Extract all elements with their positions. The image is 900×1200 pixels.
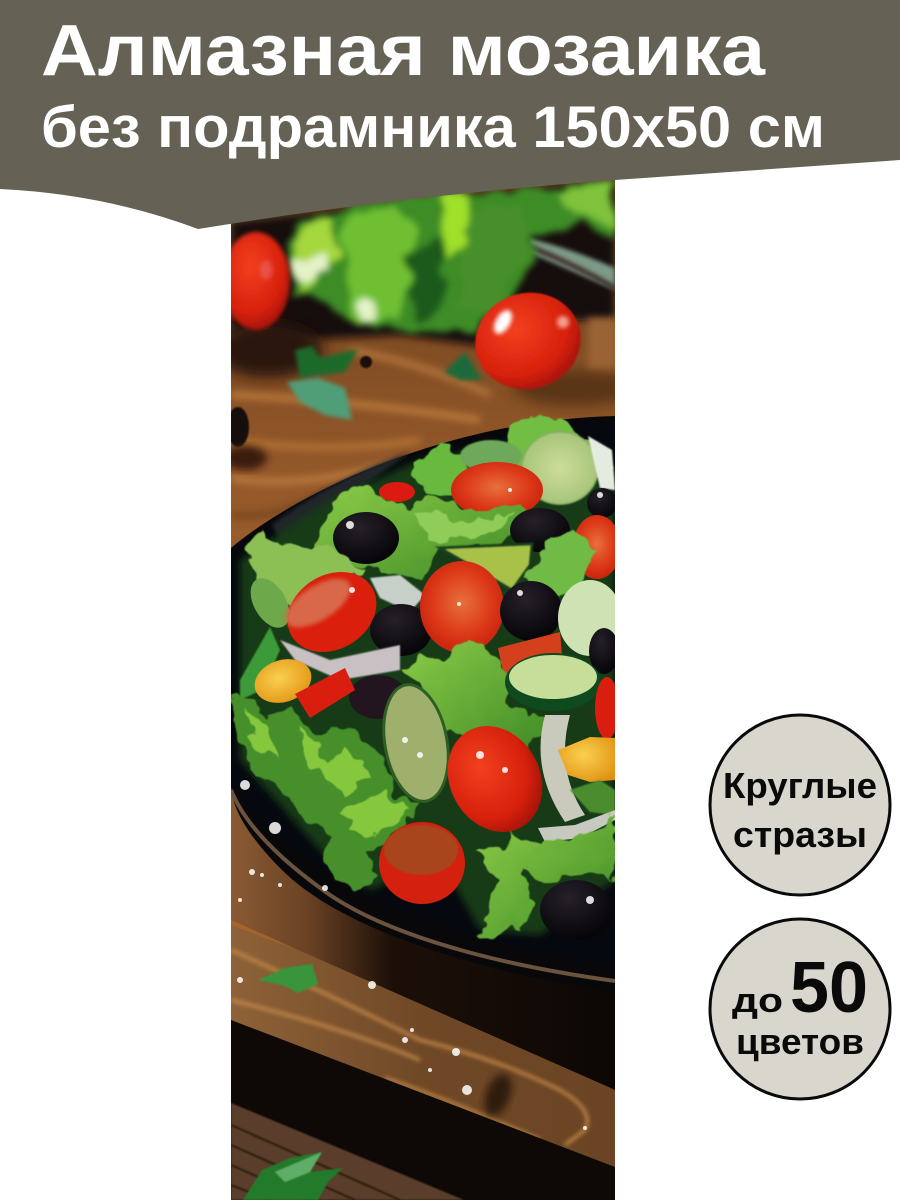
lettuce upper left <box>410 445 470 495</box>
cucumber top right <box>521 431 599 505</box>
lettuce centre <box>404 636 548 755</box>
green leaves left <box>240 627 280 700</box>
blurred lettuce at the top <box>292 182 615 335</box>
tomato half bottom face <box>384 825 458 875</box>
cucumber behind <box>460 440 522 472</box>
dark pepper on table <box>360 356 372 368</box>
sliced tomato top <box>451 462 543 518</box>
photo: salad on a wooden table <box>231 180 615 1200</box>
tomato body <box>222 232 290 330</box>
tomato half cut face <box>278 569 359 637</box>
olive shadow <box>223 446 267 470</box>
blurred tomato centre <box>474 292 582 390</box>
cucumber round <box>505 653 601 711</box>
dark background behind the greens <box>231 180 615 350</box>
tomato half left <box>273 556 391 668</box>
badge: round rhinestones <box>710 715 890 895</box>
tomato right edge <box>573 515 621 579</box>
tomato far right <box>595 677 619 739</box>
plate inner sheen <box>272 452 410 550</box>
plate surface <box>231 422 615 966</box>
dark lettuce base behind vegetables <box>240 440 615 935</box>
bottom striped boards <box>231 1103 464 1200</box>
red pepper <box>379 482 415 502</box>
olive left of centre <box>333 512 399 564</box>
lettuce bright strip <box>440 195 470 260</box>
tomato highlight <box>490 307 516 337</box>
lettuce dark fold <box>405 235 445 325</box>
onion lower <box>280 640 400 680</box>
olive far right <box>589 628 619 674</box>
herb lower leaf <box>287 378 352 420</box>
onion middle <box>370 575 425 612</box>
cucumber round face <box>509 655 597 699</box>
badge: up to 50 colours <box>710 919 890 1099</box>
herb upper leaf <box>295 346 358 378</box>
lettuce highlight <box>415 510 515 540</box>
cucumber right <box>558 580 622 656</box>
dark bottom plank <box>231 1020 615 1200</box>
plate rim highlight <box>231 790 615 981</box>
cucumber wedge <box>440 544 532 590</box>
tomato centre <box>420 561 504 653</box>
lettuce bright leaf left <box>296 216 342 295</box>
yellow tomato <box>249 652 317 710</box>
lettuce right leaf <box>461 209 524 313</box>
olive centre <box>370 604 432 656</box>
olive bottom right <box>540 880 612 940</box>
lettuce big left <box>232 695 422 892</box>
dark olive on table <box>231 406 250 448</box>
badge number 50: 50 <box>790 948 868 1028</box>
lettuce white glints <box>292 252 375 322</box>
small tomato <box>498 632 562 680</box>
spoon <box>538 810 615 842</box>
cucumber left <box>243 572 297 634</box>
blurred plate rim <box>525 245 615 288</box>
wooden table background <box>231 170 615 1200</box>
leaf back <box>243 1152 343 1200</box>
header banner <box>0 0 900 229</box>
lettuce middle <box>316 482 530 578</box>
olive lower <box>349 675 407 719</box>
plate rim <box>231 416 615 992</box>
light plank <box>231 925 615 1167</box>
water drops and salt <box>237 488 603 1130</box>
badge circle <box>710 715 890 895</box>
lettuce right <box>526 530 598 594</box>
wood patch far right <box>588 318 618 368</box>
tomato lower left <box>295 668 355 718</box>
olive right <box>500 581 562 641</box>
plank highlights <box>231 950 587 1145</box>
onion top right <box>588 436 615 490</box>
herb leaf on table <box>287 346 358 420</box>
title line 2: без подрамника 150х50 см <box>41 95 825 160</box>
blurred wood grain <box>231 350 490 516</box>
bottom plank grain <box>231 1125 400 1200</box>
wood shadow under the tomato <box>213 322 323 378</box>
herb leaf at the bottom <box>243 1152 343 1200</box>
lettuce mid leaf <box>345 205 420 325</box>
tomato half body <box>273 556 391 668</box>
badge text line 2: стразы <box>733 814 867 855</box>
lettuce far right leaf <box>555 183 612 225</box>
green leaf right <box>570 780 615 815</box>
title line 1: Алмазная мозаика <box>41 11 766 91</box>
lettuce base <box>292 182 615 335</box>
tomato body <box>474 292 582 390</box>
blurred plate at the top right <box>528 238 615 290</box>
tomato half bottom <box>379 822 465 904</box>
plank dark knot <box>479 1070 517 1120</box>
herb leaf near the plate <box>444 352 482 380</box>
lettuce lower right <box>474 815 615 942</box>
badge circle <box>710 919 890 1099</box>
olive top right <box>587 488 617 518</box>
badge text line 1: Круглые <box>723 765 877 806</box>
badge text до: до <box>732 982 783 1020</box>
tomato large <box>429 709 561 849</box>
badge text цветов: цветов <box>736 1021 864 1062</box>
lettuce big left highlights <box>245 710 410 836</box>
blurred tomato top left <box>222 232 290 330</box>
wood shadow right of the tomato <box>513 370 637 406</box>
lower table area <box>231 790 615 1090</box>
leaf light <box>275 1152 322 1182</box>
salad <box>232 416 622 942</box>
lettuce left <box>244 532 364 606</box>
olive right of centre <box>510 508 570 552</box>
herb leaf on plank <box>258 964 318 993</box>
cucumber large <box>375 680 457 806</box>
onion ring <box>540 715 585 822</box>
tomato second highlight <box>557 316 569 328</box>
tomato highlight <box>260 261 272 279</box>
yellow tomato right <box>558 737 615 782</box>
lettuce top <box>510 416 612 500</box>
